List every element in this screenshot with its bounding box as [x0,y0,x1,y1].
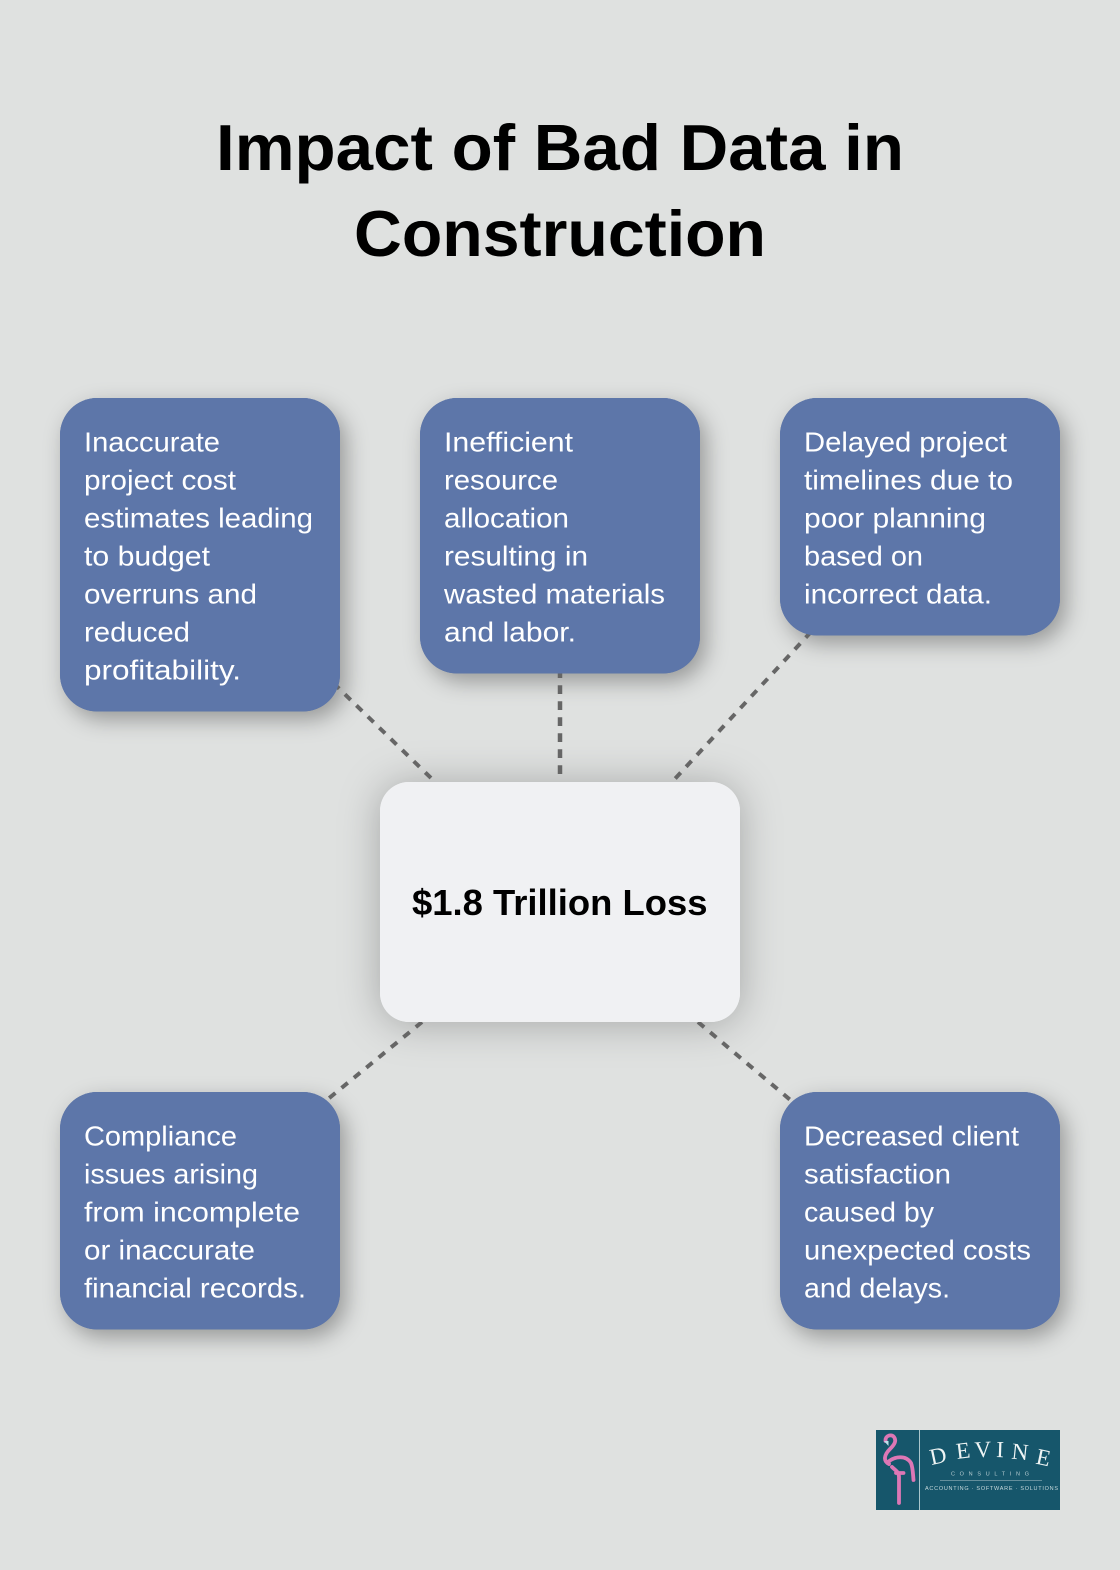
panel: decreased client satisfaction: satisfaction [804,1159,951,1190]
icon: flamingo [885,1435,914,1503]
panel: inefficient resource allocation: Inefficient [444,427,573,458]
panel: decreased client satisfaction [780,1092,1060,1330]
logo wordmark: DEVINE [927,1437,1053,1471]
connector: client satisfaction to center [698,1022,820,1125]
logo subtitle: CONSULTING [951,1472,1029,1478]
title [216,111,904,270]
panel: inefficient resource allocation: allocation [444,503,569,534]
panel: inaccurate cost estimates: overruns and [84,579,257,610]
panel: decreased client satisfaction: caused by [804,1197,934,1228]
title: Impact of Bad Data in [216,111,904,184]
logo: Devine Consulting [876,1430,1060,1510]
panel: compliance issues: or inaccurate [84,1235,255,1266]
panel: inaccurate cost estimates: reduced [84,617,190,648]
panel: delayed project timelines [780,398,1060,636]
panel: inaccurate cost estimates: estimates leading [84,503,313,534]
panel: delayed project timelines: poor planning [804,503,986,534]
logo tagline: ACCOUNTING · SOFTWARE · SOLUTIONS [925,1486,1058,1492]
panel: delayed project timelines: incorrect data. [804,579,992,610]
central panel: total loss [380,782,740,1022]
connector: cost estimates to center [322,672,432,779]
panel: inefficient resource allocation: resulting in [444,541,588,572]
panel: compliance issues: Compliance [84,1121,237,1152]
connector: resource allocation to center [558,669,562,776]
panel: compliance issues: financial records. [84,1273,306,1304]
panel: delayed project timelines: Delayed project [804,427,1007,458]
panel: inaccurate cost estimates: project cost [84,465,236,496]
panel: decreased client satisfaction: unexpected costs [804,1235,1031,1266]
panel: inefficient resource allocation: resource [444,465,558,496]
connector: compliance to center [300,1022,422,1122]
panel: inaccurate cost estimates [60,398,340,712]
panel: delayed project timelines: based on [804,541,923,572]
panel: inaccurate cost estimates: to budget [84,541,210,572]
panel: compliance issues [60,1092,340,1330]
central panel: total loss: $1.8 Trillion Loss [412,882,708,923]
panel: inefficient resource allocation: wasted materials [443,579,665,610]
panel: inaccurate cost estimates: profitability. [84,655,241,686]
panel: delayed project timelines: timelines due to [804,465,1013,496]
panel: decreased client satisfaction: Decreased client [804,1121,1019,1152]
connector: project timelines to center [672,620,822,782]
panel: compliance issues: issues arising [84,1159,258,1190]
title: Construction [354,197,766,270]
panel: inefficient resource allocation: and labor. [444,617,576,648]
panel: inaccurate cost estimates: Inaccurate [84,427,220,458]
panel: inefficient resource allocation [420,398,700,674]
panel: decreased client satisfaction: and delays. [804,1273,950,1304]
panel: compliance issues: from incomplete [84,1197,300,1228]
